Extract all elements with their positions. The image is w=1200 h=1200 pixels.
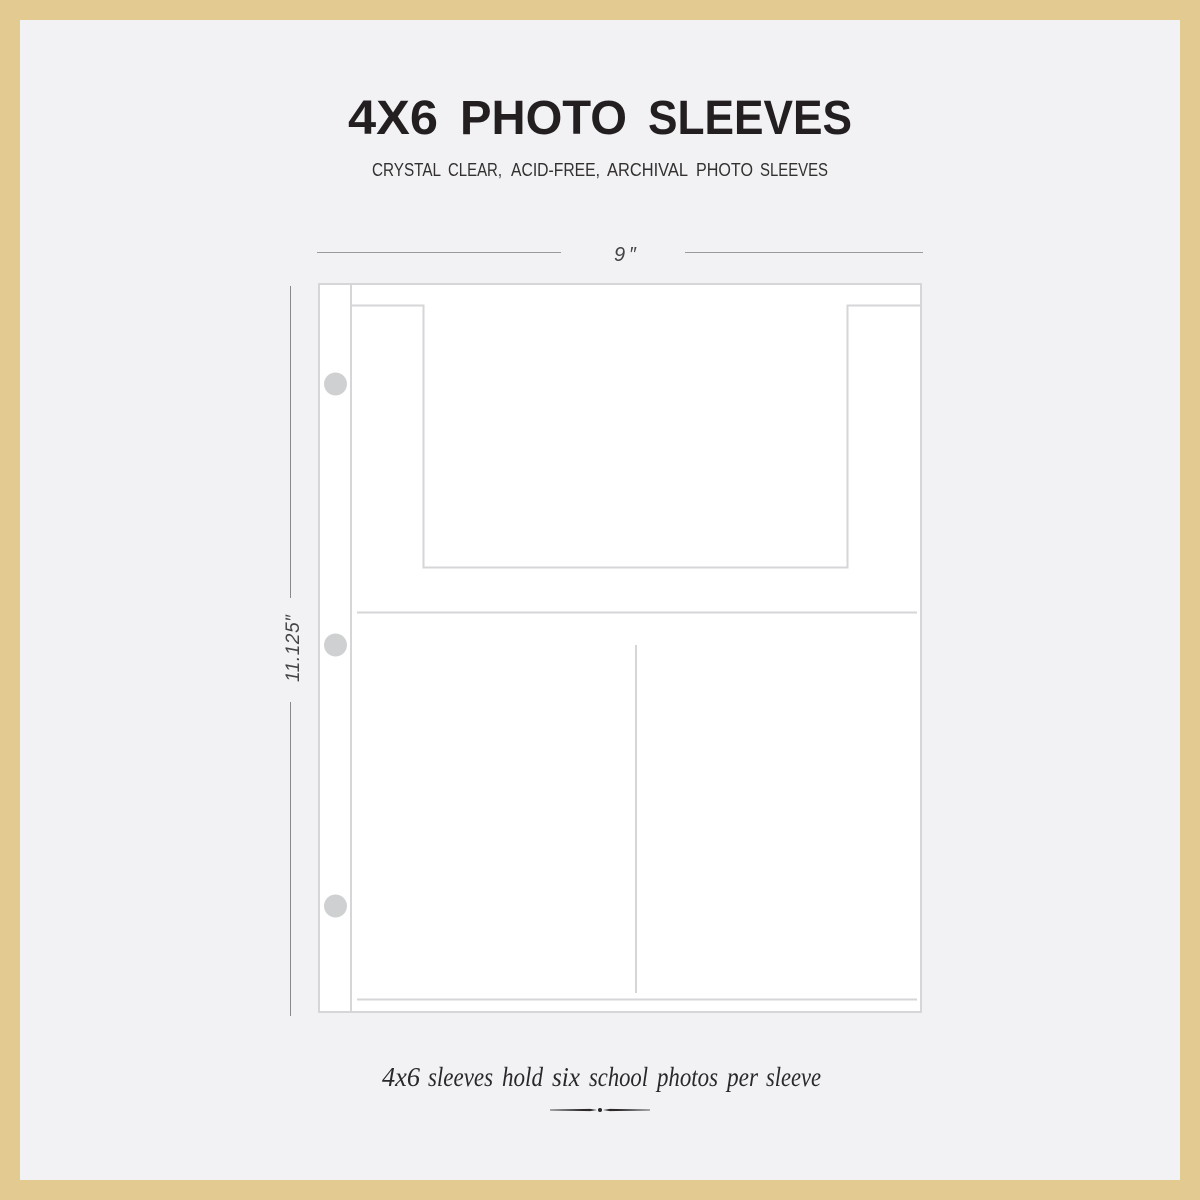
height dimension: 11.125 inches: 11.125″ [283, 614, 304, 682]
middle pocket seam [357, 612, 917, 614]
caption: sleeves [428, 1062, 493, 1092]
caption: 4x6 [382, 1062, 420, 1092]
top pocket opening [351, 306, 921, 568]
sleeve outline [319, 284, 921, 1012]
title [348, 92, 852, 145]
caption: per [725, 1062, 758, 1092]
subtitle: CRYSTAL [372, 160, 441, 180]
binding strip divider [350, 284, 352, 1012]
caption: school [589, 1062, 648, 1092]
photo sleeve page [319, 284, 921, 1012]
subtitle: CLEAR, [448, 160, 502, 180]
title: PHOTO [460, 92, 627, 145]
subtitle: ARCHIVAL [607, 160, 688, 180]
binder holes [324, 372, 347, 918]
subtitle: PHOTO [696, 160, 753, 180]
caption [382, 1062, 821, 1092]
caption: six [552, 1062, 580, 1092]
caption: photos [655, 1062, 718, 1092]
caption: hold [502, 1062, 543, 1092]
title: SLEEVES [648, 92, 852, 145]
caption: sleeve [766, 1062, 821, 1092]
decorative flourish [550, 1108, 650, 1112]
width dimension: 9 inches: 9″ [614, 244, 637, 266]
subtitle: SLEEVES [760, 160, 828, 180]
subtitle: ACID-FREE, [511, 160, 600, 180]
subtitle [372, 160, 828, 180]
title: 4X6 [348, 92, 438, 145]
bottom pocket seam [357, 998, 917, 1000]
vertical pocket seam [635, 645, 637, 993]
